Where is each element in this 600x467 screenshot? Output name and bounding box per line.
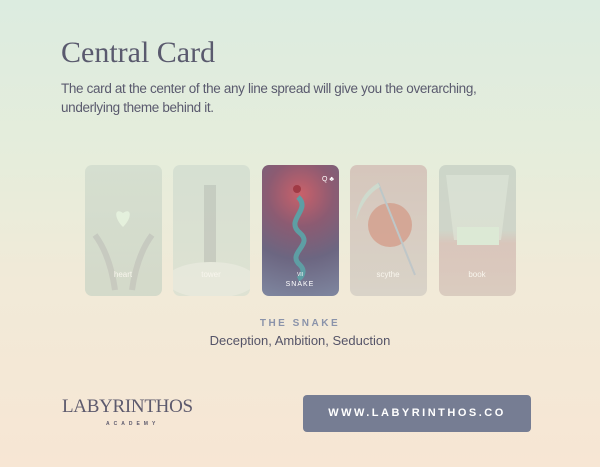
description: underlying theme behind it. [61, 100, 214, 115]
logo: LABYRINTHOS [62, 396, 193, 417]
website button [303, 395, 531, 432]
card: scythe: scythe [376, 270, 400, 279]
card: scythe [350, 165, 427, 296]
logo [62, 396, 193, 427]
card: snake (central) [262, 165, 339, 296]
card: snake (central): Q ♣ [322, 176, 334, 183]
card name label: THE SNAKE [260, 318, 340, 329]
logo: ACADEMY [106, 421, 159, 427]
card: book: book [468, 270, 487, 279]
card: book [439, 165, 516, 296]
website button: WWW.LABYRINTHOS.CO [328, 407, 506, 419]
card: snake (central): VII [297, 272, 303, 278]
card keywords: Deception, Ambition, Seduction [210, 333, 390, 348]
card: tower [173, 165, 250, 296]
description: The card at the center of the any line spread will give you the overarching, [61, 81, 476, 96]
description [61, 81, 476, 115]
card: tower: tower [201, 270, 221, 279]
card: snake (central): SNAKE [286, 281, 314, 288]
title: Central Card [61, 36, 215, 69]
card: heart [85, 165, 162, 296]
card: heart: heart [114, 270, 133, 279]
